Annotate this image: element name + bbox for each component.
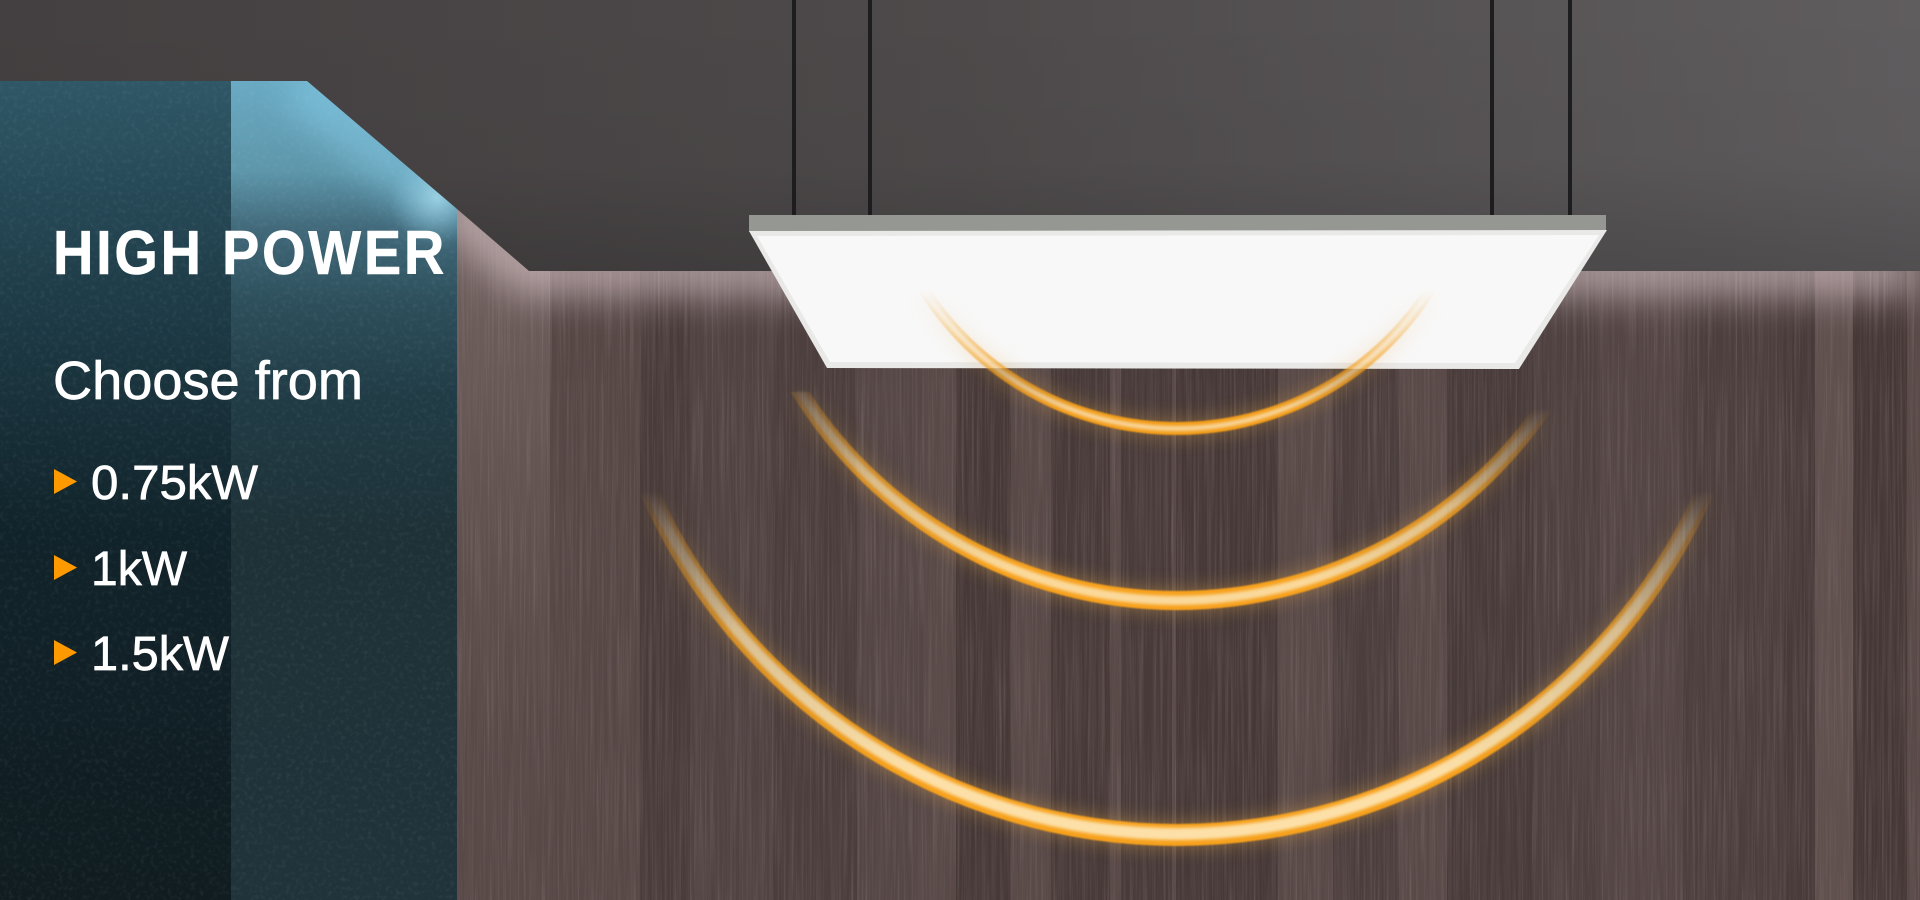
heat wave: small arc xyxy=(918,290,1436,435)
option: 1.5kW: 1.5kW xyxy=(91,628,230,681)
heat wave: large arc xyxy=(639,490,1715,846)
subheading: Choose from xyxy=(53,351,363,411)
ceiling xyxy=(0,0,1920,280)
wood wall xyxy=(440,195,1920,900)
ceiling panel heater xyxy=(749,215,1607,369)
option: 1kW: 1kW xyxy=(91,543,188,596)
option: 0.75kW: 0.75kW xyxy=(91,457,259,510)
suspension wires xyxy=(792,0,1572,216)
heat wave: medium arc xyxy=(791,392,1563,610)
heading: HIGH POWER xyxy=(53,219,447,288)
teal side panel xyxy=(0,78,470,900)
